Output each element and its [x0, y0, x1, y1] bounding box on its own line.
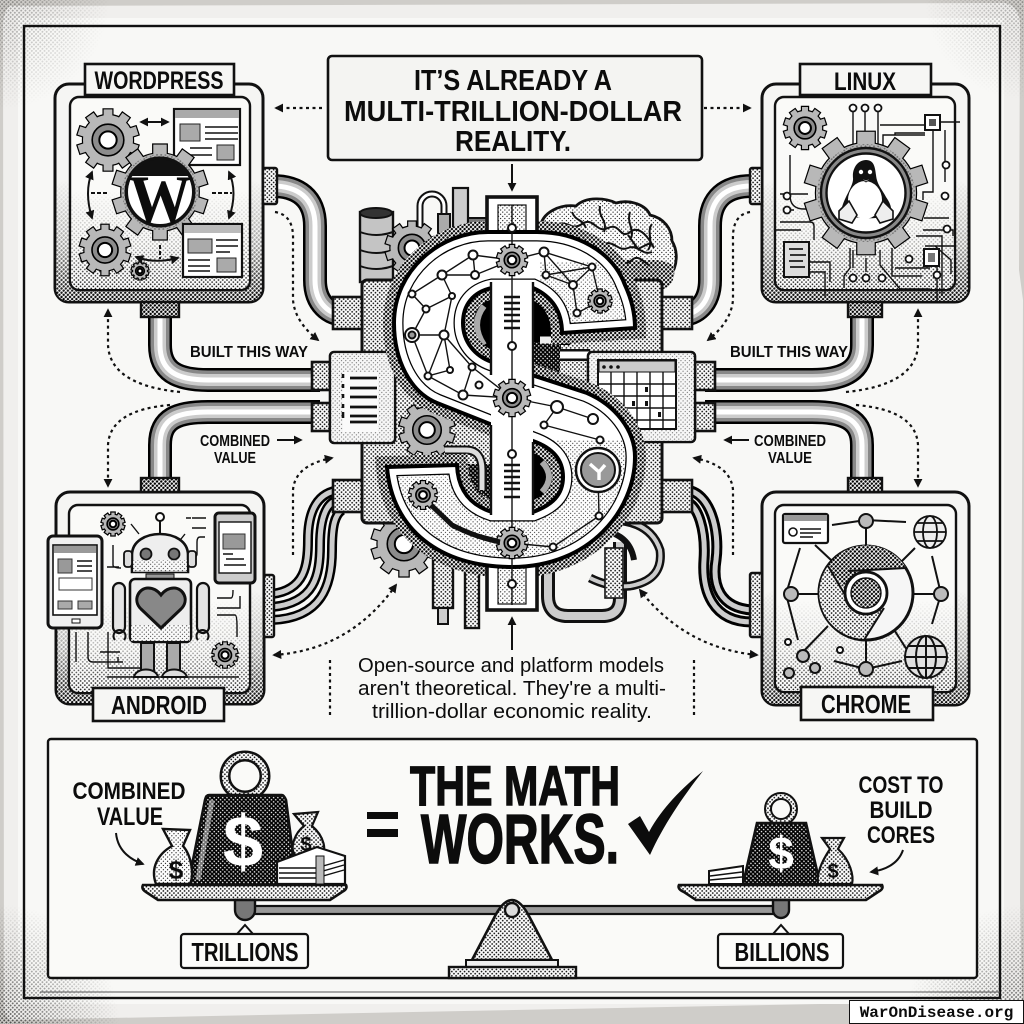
chips	[784, 115, 940, 277]
watermark	[850, 1000, 1024, 1024]
body text: trillion-dollar economic reality.	[372, 701, 652, 723]
body text: Open-source and platform models	[358, 655, 664, 677]
watermark: WarOnDisease.org	[860, 1004, 1013, 1022]
chassis	[362, 280, 662, 523]
icon: penguin	[839, 160, 893, 223]
icon: robot	[113, 513, 209, 677]
heading: the math works	[410, 754, 620, 878]
label: Android: ANDROID	[111, 690, 207, 720]
icon: brain	[540, 199, 676, 291]
heavy weight: $	[223, 802, 263, 882]
weight ring	[768, 796, 794, 822]
icon: WordPress logo gear	[113, 145, 207, 239]
icon: Chrome logo	[819, 545, 913, 640]
connector: Chrome top	[848, 478, 882, 492]
heading: the math works: THE MATH	[410, 754, 620, 817]
body text: aren't theoretical. They're a multi-	[358, 678, 666, 700]
icon: right phone	[215, 513, 255, 583]
window: top	[174, 109, 240, 165]
scale left: trillions	[142, 756, 346, 920]
beam	[246, 906, 782, 914]
label: combined value: VALUE	[97, 803, 163, 831]
arrows: WordPress inner cycle	[88, 122, 234, 261]
icon: Linux penguin gear	[805, 132, 927, 254]
panel: Linux	[750, 64, 969, 317]
pivot	[773, 900, 789, 918]
label: trillions	[181, 925, 308, 968]
connecting pipes	[160, 186, 862, 622]
money bag	[818, 838, 852, 884]
S shadow	[387, 232, 635, 567]
connector: Linux bottom	[848, 302, 882, 317]
money bag right	[293, 812, 324, 856]
label: Linux	[800, 64, 931, 96]
cash stack	[709, 866, 743, 884]
scale right: billions	[679, 796, 882, 918]
cash stack	[277, 847, 345, 884]
labels: combined value	[200, 433, 826, 467]
icon: small globe	[914, 516, 946, 548]
label: cost to build cores: CORES	[867, 822, 935, 849]
money bag right: $	[300, 834, 312, 856]
label: billions: BILLIONS	[734, 937, 830, 967]
icon: data cylinder	[360, 208, 393, 282]
labels: combined value: COMBINED	[754, 433, 826, 450]
title callout	[328, 56, 702, 160]
icon: gear lower	[212, 642, 238, 668]
label: combined value: COMBINED	[72, 778, 186, 805]
heavy weight	[188, 795, 297, 885]
icon: gear top left	[78, 109, 138, 171]
label: billions	[718, 925, 843, 968]
icon: gear small	[784, 107, 826, 149]
icon: gear bottom left	[80, 225, 130, 275]
small weight: $	[768, 827, 794, 879]
labels: built this way: BUILT THIS WAY	[190, 344, 309, 361]
network on dollar	[412, 252, 600, 547]
label: trillions: TRILLIONS	[192, 937, 298, 967]
panel: Chrome	[750, 478, 969, 720]
equals sign	[367, 812, 398, 837]
panel: the math works	[48, 739, 977, 978]
connector: Linux left	[750, 168, 762, 204]
label: cost to build cores	[858, 772, 944, 872]
nodes on dollar	[405, 224, 604, 588]
labels: built this way	[190, 344, 849, 361]
body text	[358, 655, 666, 723]
connector: WordPress bottom	[141, 302, 179, 317]
connectors	[312, 297, 715, 512]
circuit traces	[776, 112, 960, 301]
label: cost to build cores: COST TO	[858, 772, 944, 799]
labels: combined value: VALUE	[214, 450, 256, 467]
label: combined value	[72, 778, 186, 864]
label: WordPress: WORDPRESS	[94, 67, 224, 95]
plate	[142, 885, 346, 900]
pivot	[235, 900, 255, 920]
magnifier	[576, 448, 620, 492]
small weight	[743, 823, 820, 884]
icon: gears	[102, 513, 124, 535]
gears on dollar	[409, 245, 611, 558]
icon: gear behind top left	[386, 222, 438, 274]
weight ring	[225, 756, 265, 796]
heading: the math works: WORKS.	[421, 800, 619, 878]
dashed arrows	[108, 108, 918, 718]
money bag left	[154, 829, 192, 885]
dollar sign	[385, 197, 640, 610]
icon: WordPress logo gear: W	[129, 161, 191, 237]
window: bottom	[183, 224, 242, 277]
connector: Android top	[141, 478, 179, 492]
labels: combined value: COMBINED	[200, 433, 270, 450]
title callout: MULTI-TRILLION-DOLLAR	[344, 96, 682, 128]
nodes	[784, 104, 950, 282]
label: Linux: LINUX	[834, 68, 896, 96]
labels: combined value: VALUE	[768, 450, 812, 467]
money bag: $	[827, 861, 839, 883]
inner pipes	[530, 330, 590, 355]
title callout: REALITY.	[455, 126, 571, 158]
icon: left phone	[48, 536, 102, 628]
central machine behind dollar	[312, 188, 715, 628]
label: Chrome: CHROME	[821, 689, 911, 719]
label: cost to build cores: BUILD	[870, 797, 932, 824]
icon: large globe	[905, 636, 947, 678]
dark counters	[445, 284, 575, 520]
right module	[588, 352, 695, 442]
icon: gear behind bottom left	[372, 512, 436, 576]
plate	[679, 885, 882, 900]
network lines	[786, 520, 941, 675]
title callout: IT’S ALREADY A	[414, 65, 612, 97]
panel: WordPress	[55, 64, 277, 317]
panel: Android	[48, 478, 274, 721]
circuit lines	[76, 518, 240, 677]
stem top	[487, 197, 537, 241]
icon: chassis gear	[400, 402, 454, 458]
S body	[385, 232, 640, 575]
top tubes	[420, 188, 490, 240]
checkmark	[628, 771, 703, 855]
connector: WordPress right	[263, 168, 277, 204]
node circles	[784, 514, 948, 678]
icon: browser card	[783, 514, 828, 543]
stem bottom	[487, 556, 537, 610]
vertical strip	[491, 205, 533, 605]
left module	[330, 352, 395, 443]
connector: Chrome left	[750, 573, 762, 637]
icon: small gear	[132, 263, 148, 279]
crank	[431, 505, 500, 542]
connector: Android right	[264, 575, 274, 637]
bottom tubes	[433, 520, 660, 628]
labels: built this way: BUILT THIS WAY	[730, 344, 849, 361]
fulcrum	[449, 900, 576, 978]
money bag left: $	[169, 855, 184, 885]
